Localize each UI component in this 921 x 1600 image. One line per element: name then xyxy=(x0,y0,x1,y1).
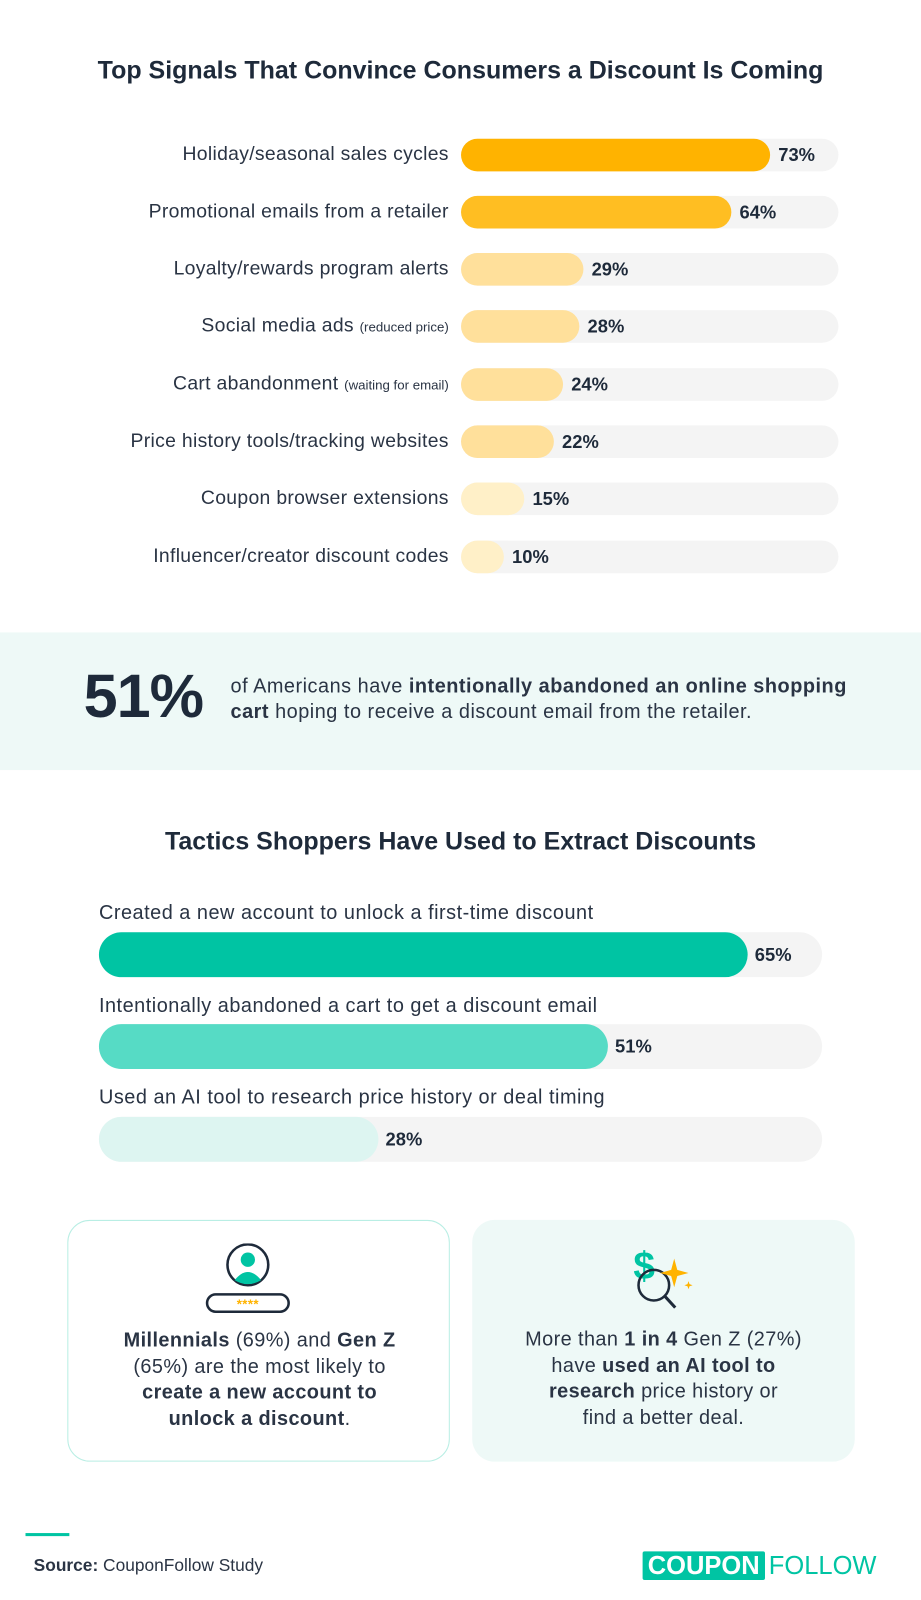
bar chart: tactics: Used an AI tool to research price history or deal timing xyxy=(99,1086,605,1109)
callout band: 51% xyxy=(0,632,921,770)
icon: dollar magnifier: $ xyxy=(633,1245,655,1288)
bar chart: signals: Price history tools/tracking websites xyxy=(130,430,449,452)
bar chart: signals: 64% xyxy=(740,202,776,222)
bar chart: signals: Promotional emails from a retailer xyxy=(149,201,449,222)
footer accent line xyxy=(26,1533,69,1536)
bar chart: signals: Loyalty/rewards program alerts xyxy=(174,258,449,279)
title: tactics: Tactics Shoppers Have Used to Extract Discounts xyxy=(165,828,756,856)
big stat: 51% xyxy=(84,662,203,730)
bar chart: signals: 10% xyxy=(512,547,549,567)
bar chart: signals: Influencer/creator discount codes xyxy=(153,546,449,567)
icon: dollar magnifier xyxy=(633,1245,692,1309)
bar chart: signals: Social media ads (reduced price) xyxy=(201,315,449,337)
bar chart: tactics: 65% xyxy=(755,945,792,965)
bar chart: signals: 24% xyxy=(571,374,608,395)
row: holiday xyxy=(182,138,838,172)
card text xyxy=(124,1329,396,1430)
card: millennials xyxy=(67,1220,450,1462)
bar chart: signals: 73% xyxy=(778,145,815,165)
title: top signals: Top Signals That Convince Consumers a Discount Is Coming xyxy=(98,57,823,85)
bar chart: signals: 28% xyxy=(588,316,624,337)
card text: create a new account to xyxy=(142,1381,377,1404)
bar chart: signals: Cart abandonment (waiting for email) xyxy=(173,373,449,395)
row: coupon ext xyxy=(201,482,838,516)
row: cart xyxy=(173,368,838,401)
row: loyalty xyxy=(174,253,838,286)
bar chart: signals xyxy=(130,138,838,574)
bar chart: tactics: 51% xyxy=(615,1036,652,1057)
card text: have used an AI tool to xyxy=(551,1354,776,1376)
row: social xyxy=(201,310,838,343)
card text: (65%) are the most likely to xyxy=(133,1355,386,1378)
row: price history xyxy=(130,425,838,458)
bar chart: signals: Holiday/seasonal sales cycles xyxy=(182,144,449,165)
row: influencer xyxy=(153,540,838,574)
card: gen z AI xyxy=(472,1220,855,1462)
stat text xyxy=(231,675,847,723)
row: abandoned cart xyxy=(98,994,822,1069)
bar chart: signals: 22% xyxy=(562,431,599,452)
bar chart: tactics xyxy=(98,902,822,1162)
bar chart: tactics: Created a new account to unlock a first-time discount xyxy=(99,902,594,924)
card text: unlock a discount. xyxy=(169,1407,351,1430)
row: emails xyxy=(149,196,838,228)
bar chart: tactics: 28% xyxy=(386,1129,422,1150)
logo: couponfollow: COUPON FOLLOW xyxy=(648,1551,876,1580)
card text: research price history or xyxy=(549,1380,778,1402)
bar chart: tactics: Intentionally abandoned a cart to get a discount email xyxy=(99,994,598,1017)
bar chart: signals: 29% xyxy=(592,259,628,279)
card text: More than 1 in 4 Gen Z (27%) xyxy=(525,1328,802,1350)
bar chart: signals: 15% xyxy=(532,489,569,509)
card text: Millennials (69%) and Gen Z xyxy=(124,1329,396,1352)
card text: find a better deal. xyxy=(583,1406,744,1429)
card text xyxy=(525,1328,802,1429)
stat text: cart hoping to receive a discount email from the retailer. xyxy=(231,701,752,723)
row: AI tool xyxy=(99,1086,822,1162)
bar chart: signals: Coupon browser extensions xyxy=(201,488,449,509)
icon: user account: **** xyxy=(237,1297,259,1312)
row: new account xyxy=(98,902,822,978)
source: Source: CouponFollow Study xyxy=(34,1556,263,1575)
icon: user account xyxy=(206,1243,290,1313)
stat text: of Americans have intentionally abandoned an online shopping xyxy=(231,675,847,698)
